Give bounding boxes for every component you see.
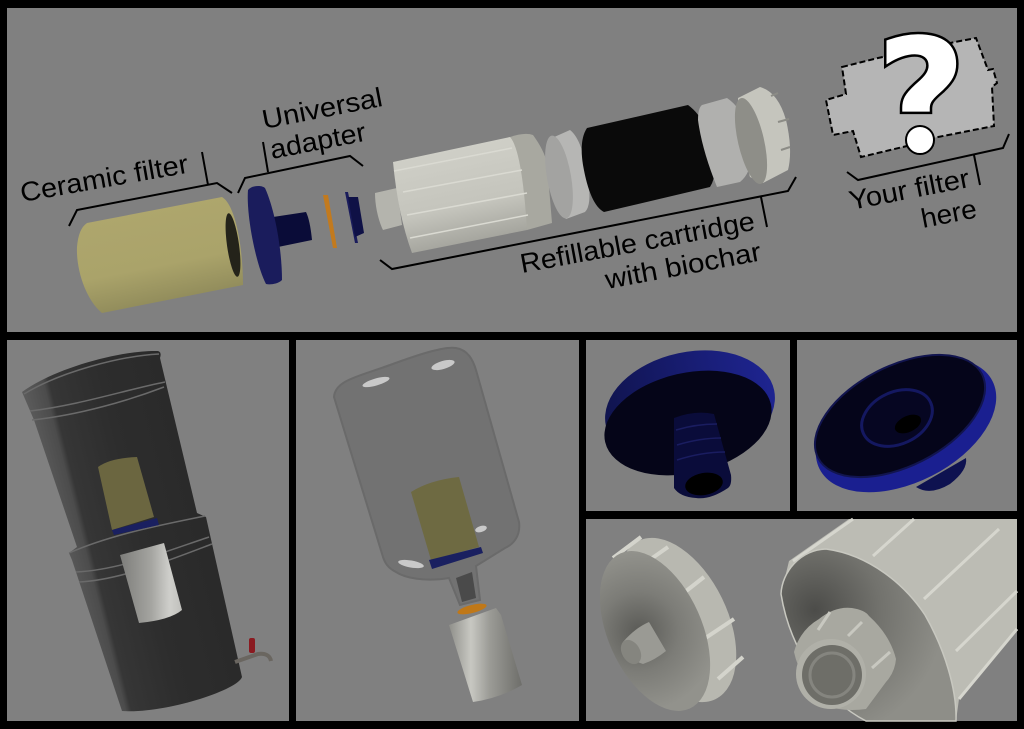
panel: exploded view	[7, 5, 1017, 332]
label: your filter	[846, 134, 1009, 234]
orange ring	[456, 601, 488, 617]
tank rims and threads	[24, 354, 212, 582]
panel: adapter back	[794, 330, 1018, 520]
adapter inside	[112, 518, 159, 535]
label: ceramic filter	[18, 149, 232, 226]
label: universal adapter: Universal	[259, 82, 385, 135]
threaded opening	[794, 608, 896, 710]
label: universal adapter	[238, 82, 385, 193]
panel: adapter front	[586, 335, 790, 511]
icon: question mark: ?	[876, 5, 966, 187]
bottle highlights	[362, 358, 488, 570]
biochar cartridge	[582, 105, 715, 212]
label: refillable cartridge: Refillable cartridge	[518, 206, 757, 279]
label: your filter: here	[918, 194, 979, 234]
your filter placeholder	[825, 32, 998, 158]
tank body	[22, 351, 242, 711]
cap	[577, 519, 761, 728]
adapter in bottle	[429, 547, 483, 569]
ceramic filter	[77, 197, 243, 313]
neck connector	[456, 572, 476, 602]
threaded stem	[674, 413, 731, 498]
universal adapter large part	[248, 186, 312, 284]
cartridge inside	[120, 543, 182, 623]
panel: bottle system	[296, 340, 579, 721]
label: universal adapter: adapter	[267, 117, 368, 165]
panel: stacked container system	[7, 340, 289, 721]
label: ceramic filter: Ceramic filter	[18, 149, 190, 208]
ceramic filter inside	[98, 457, 154, 530]
icon: question mark	[884, 32, 959, 155]
label: refillable cartridge: with biochar	[602, 237, 763, 295]
refillable cartridge body	[375, 134, 552, 253]
cartridge filter pad and cap	[698, 87, 790, 187]
label: refillable cartridge	[380, 177, 796, 295]
label: your filter: Your filter	[846, 163, 972, 216]
cartridge filter pad	[540, 130, 589, 220]
ceramic filter in bottle	[411, 477, 479, 560]
inner ring	[852, 379, 942, 457]
cartridge below bottle	[449, 608, 522, 702]
threaded stem	[617, 622, 666, 668]
cartridge end	[781, 519, 1017, 721]
panel: cartridge close-ups	[577, 519, 1017, 728]
universal adapter small parts	[323, 192, 364, 248]
tap	[235, 638, 271, 662]
bottle	[334, 348, 519, 605]
